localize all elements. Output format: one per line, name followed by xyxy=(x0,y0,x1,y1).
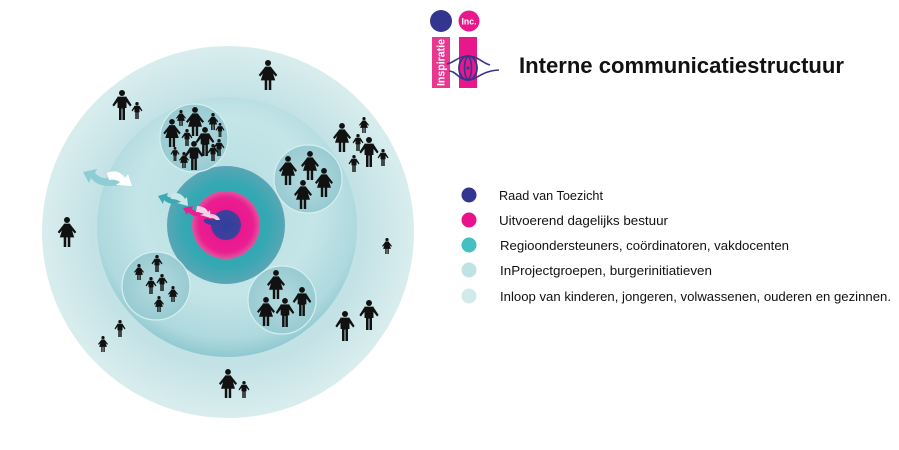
title: Interne communicatiestructuur xyxy=(519,53,844,78)
group circle: bottom left xyxy=(122,252,190,320)
teal circle: regioondersteuners xyxy=(167,166,285,284)
group circle: right xyxy=(274,145,342,213)
logo: left bar with Inspiratie: Inspiratie xyxy=(436,39,448,86)
group circle: top xyxy=(160,104,228,172)
legend item: Raad van Toezicht: Raad van Toezicht xyxy=(499,188,603,203)
legend xyxy=(462,188,891,304)
group circle: bottom right xyxy=(248,266,316,334)
arrow: blue to pink xyxy=(204,214,225,228)
legend item: Regioondersteuners: Regioondersteuners, coördinatoren, vakdocenten xyxy=(500,238,789,253)
outer circle: inloop xyxy=(42,46,414,418)
logo: Inspiratie Inc. xyxy=(430,10,499,88)
logo: blue swirl xyxy=(447,56,499,80)
middle circle: projectgroepen xyxy=(97,97,357,357)
arrow: pink to teal xyxy=(183,206,211,218)
logo: blue dot xyxy=(430,10,452,32)
legend item: Uitvoerend dagelijks bestuur: Uitvoerend dagelijks bestuur xyxy=(499,213,669,228)
pink circle: dagelijks bestuur xyxy=(192,191,260,259)
logo: right bar xyxy=(459,37,477,88)
blue circle: raad van toezicht xyxy=(211,210,241,240)
legend item: InProjectgroepen: InProjectgroepen, burgerinitiatieven xyxy=(500,263,712,278)
legend item: Inloop: Inloop van kinderen, jongeren, volwassenen, ouderen en gezinnen. xyxy=(500,289,891,304)
diagram: concentric circles xyxy=(42,46,414,418)
logo: pink dot with Inc.: Inc. xyxy=(462,16,476,26)
arrow: teal to middle xyxy=(158,193,188,206)
arrow: outer exchange xyxy=(83,169,132,186)
people in outer ring xyxy=(58,60,392,398)
